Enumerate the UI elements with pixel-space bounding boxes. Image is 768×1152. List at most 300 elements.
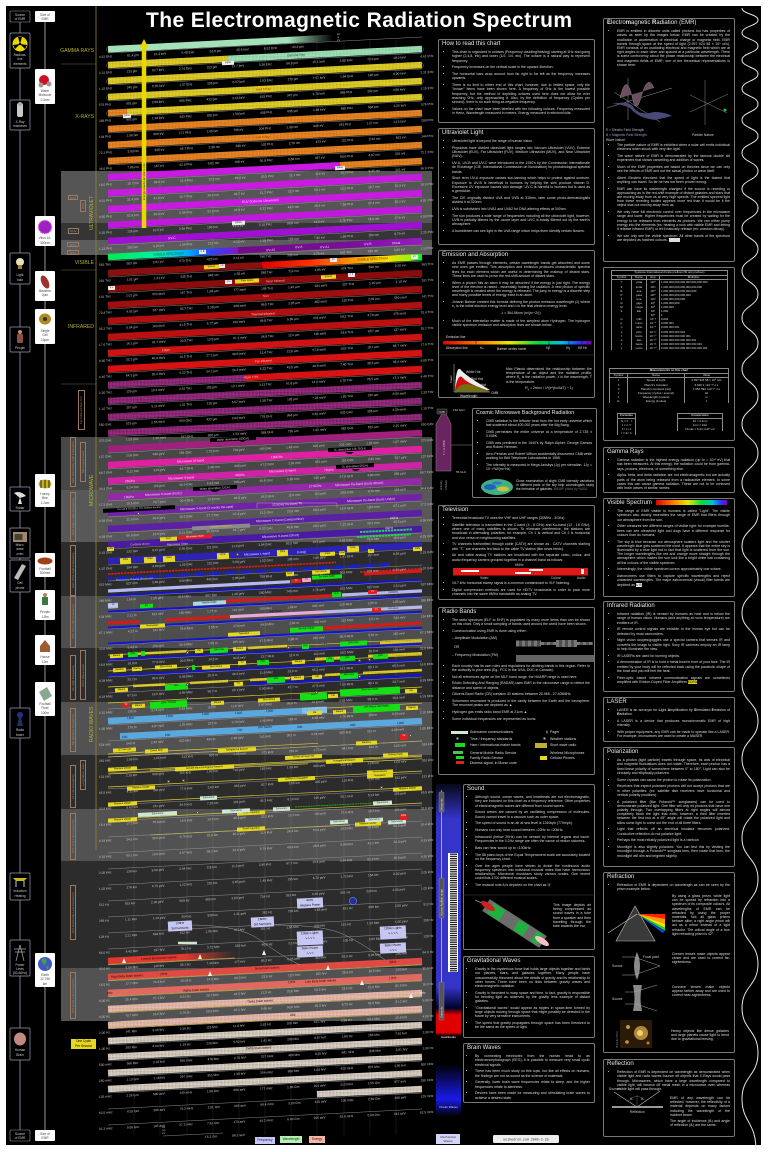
table: SI unit prefixes: 0.001 [661, 317, 668, 321]
axis labels: frequency, wavelength and energy for every octave row: 1.48 MHz [259, 718, 273, 723]
table: measurements on this chart: J [706, 399, 707, 403]
axis labels: frequency, wavelength and energy for every octave row: 20.1 m [368, 665, 378, 669]
axis labels: frequency, wavelength and energy for every octave row: 1.59 PHz [260, 238, 273, 243]
axis labels: frequency, wavelength and energy for every octave row: 370 neV [233, 624, 245, 628]
axis labels: frequency, wavelength and energy for every octave row: 2.63 Mm [369, 937, 381, 941]
source: power lines [10, 940, 30, 976]
panel: laser: LASER [607, 699, 627, 705]
panel: electromagnetic radiation: The particle nature of EMR is exhibited when a solar cell emits individual electrons when struck with very dim light. [617, 143, 730, 151]
axis labels: frequency, wavelength and energy for every octave row: 206 pm [207, 81, 218, 85]
axis labels: frequency, wavelength and energy for every octave row: 1.10 THz [420, 406, 434, 411]
axis labels: frequency, wavelength and energy for every octave row: 123 pm [127, 69, 137, 74]
icon: cmb sky map [481, 479, 513, 495]
axis labels: frequency, wavelength and energy for every octave row: 8.39 MHz [99, 678, 113, 683]
axis labels: frequency, wavelength and energy for every octave row: 138 km [126, 869, 137, 874]
axis labels: frequency, wavelength and energy for every octave row: 778 GHz [260, 414, 272, 419]
axis labels: frequency, wavelength and energy for every octave row: 8.19 kHz [421, 838, 434, 843]
axis labels: frequency, wavelength and energy for every octave row: 695 pm [287, 109, 298, 113]
chart: prism [608, 906, 665, 941]
axis labels: frequency, wavelength and energy for every octave row: 64.0 peV [393, 823, 406, 828]
axis labels: frequency, wavelength and energy for every octave row: 210 mHz [340, 1082, 353, 1087]
axis labels: frequency, wavelength and energy for every octave row: 8.59 GHz [420, 518, 434, 523]
table: SI unit prefixes: peta [636, 293, 642, 297]
axis labels: frequency, wavelength and energy for every octave row: 4.22 m [128, 629, 138, 634]
table: SI unit prefixes: E [621, 289, 622, 293]
axis labels: frequency, wavelength and energy for every octave row: 2.43 neV [151, 740, 164, 744]
chips and labels placed on the spectrum bars: 13Hz [288, 980, 296, 984]
axis labels: frequency, wavelength and energy for every octave row: 3.72 Mm [207, 945, 219, 949]
chart: hydrogen spectrum lines [438, 335, 595, 355]
axis labels: frequency, wavelength and energy for every octave row: 1.68 peV [314, 907, 327, 912]
axis labels: frequency, wavelength and energy for every octave row: 465 km [205, 897, 216, 902]
panel: infrared radiation: IR LASERs are used for burning objects. [617, 654, 680, 658]
chips and labels placed on the spectrum bars: Marine [135, 704, 142, 707]
axis labels: frequency, wavelength and energy for every octave row: 83.6 eV [154, 180, 165, 184]
axis labels: frequency, wavelength and energy for every octave row: 19.5 kHz [180, 818, 193, 823]
axis labels: frequency, wavelength and energy for every octave row: 9.98 MHz [179, 674, 193, 679]
axis labels: frequency, wavelength and energy for every octave row: 1.00 peV [395, 919, 408, 924]
chips and labels placed on the spectrum bars: Energy Levels Harmful to Life [142, 163, 146, 200]
axis labels: frequency, wavelength and energy for every octave row: 3.44 neV [311, 732, 324, 736]
axis labels: frequency, wavelength and energy for every octave row: 67.1 MHz [99, 630, 113, 635]
text: prism caption: By using a glass prism, white light can be spread by refraction into a spectrum of its composite colours. All wavelengths of EMR can be refracted by using the proper materials. Not all glass prisms behave alike; a right angle prism will act as a mirror instead of a light refractor. The critical angle of a true light refracting prism is 42°. [672, 894, 730, 936]
band name labels and frequency range tags: Long Wave radio [81, 764, 85, 786]
axis labels: frequency, wavelength and energy for every octave row: 47.7 m [288, 685, 298, 689]
axis labels: frequency, wavelength and energy for every octave row: 3.88 EHz [339, 58, 353, 63]
axis labels: frequency, wavelength and energy for every octave row: 128 peV [394, 807, 406, 812]
axis labels: frequency, wavelength and energy for every octave row: 18.7 nm [368, 185, 380, 189]
panel: ultraviolet light: Ultraviolet light is beyond the range of human vision. [452, 139, 533, 143]
axis labels: frequency, wavelength and energy for every octave row: 9.57 µm [368, 329, 379, 333]
axis labels: frequency, wavelength and energy for every octave row: 4.53 Gm [127, 1109, 139, 1114]
chart: reflection angle: Source [609, 1087, 620, 1091]
chips and labels placed on the spectrum bars: TV [240, 661, 244, 664]
source: human brain [10, 1028, 30, 1060]
axis labels: frequency, wavelength and energy for every octave row: 81.7 meV [152, 340, 166, 344]
axis labels: frequency, wavelength and energy for every octave row: 1.45 kHz [260, 878, 273, 883]
axis labels: frequency, wavelength and energy for every octave row: 1.63 EHz [260, 78, 273, 83]
chips and labels placed on the spectrum bars: Time/Frequency [242, 811, 260, 814]
axis labels: frequency, wavelength and energy for every octave row: 149 feV [153, 964, 164, 968]
size: earth: Earth [41, 973, 49, 977]
axis labels: frequency, wavelength and energy for every octave row: 5.69 µm [287, 317, 299, 321]
table: SI unit prefixes: z [621, 342, 622, 346]
axis labels: frequency, wavelength and energy for every octave row: 195 km [287, 877, 298, 881]
chips and labels placed on the spectrum bars: 40m Ham [344, 673, 354, 676]
axis labels: frequency, wavelength and energy for every octave row: 7.81 feV [395, 1031, 407, 1036]
axis labels: frequency, wavelength and energy for every octave row: 2.90 kHz [259, 862, 272, 867]
panel: television: Terrestrial broadcast TV uses the VHF and UHF ranges (30MHz - 3GHz) . [452, 516, 566, 520]
axis labels: frequency, wavelength and energy for every octave row: 215 peV [314, 795, 326, 800]
axis labels: frequency, wavelength and energy for every octave row: 343 PHz [179, 114, 192, 119]
chips and labels placed on the spectrum bars: Navigation [374, 773, 386, 777]
table: SI unit prefixes: 10⁻¹⁵ [650, 334, 656, 338]
axis labels: frequency, wavelength and energy for every octave row: 658 km [368, 905, 379, 909]
chips and labels placed on the spectrum bars: 30m Ham Radio [361, 688, 379, 691]
axis labels: frequency, wavelength and energy for every octave row: 2.25 PHz [99, 230, 112, 235]
chips and labels placed on the spectrum bars: UV-A2 [266, 248, 275, 252]
axis labels: frequency, wavelength and energy for every octave row: 2.68 keV [152, 100, 164, 104]
axis labels: frequency, wavelength and energy for every octave row: 327 GHz [181, 434, 193, 439]
size: single cell: 10µm [41, 338, 49, 342]
axis labels: frequency, wavelength and energy for every octave row: 45.5 µm [287, 365, 298, 369]
axis labels: frequency, wavelength and energy for every octave row: 19.6 mm [367, 505, 380, 509]
source: light bulb: bulb [17, 278, 23, 282]
source: microwave oven [10, 528, 30, 558]
panel: sound: Infrasound (below 20Hz) can be sensed by internal organs and touch. Frequencies in the 0.2Hz range are often the cause of motion sickness. [475, 835, 590, 843]
table: SI unit prefixes: 1,000,000,000 [661, 301, 680, 305]
legend: radio band icons: Family Radio Service [470, 756, 503, 760]
axis labels: frequency, wavelength and energy for every octave row: 5.26 Mm [368, 953, 381, 957]
axis labels: frequency, wavelength and energy for every octave row: 14.8 THz [340, 346, 353, 351]
chart: EM wave model: Wave Nature [606, 138, 625, 142]
axis labels: frequency, wavelength and energy for every octave row: 1.16 feV [153, 1076, 165, 1080]
axis labels: frequency, wavelength and energy for every octave row: 18.6 feV [153, 1012, 165, 1016]
band name labels and frequency range tags: VHF Very High Frequency [71, 605, 75, 639]
axis labels: frequency, wavelength and energy for every octave row: 256 Hz [99, 918, 109, 923]
panel: radio bands: Radio Bands [442, 609, 476, 615]
chips and labels placed on the spectrum bars: 1300 [235, 711, 242, 715]
axis labels: frequency, wavelength and energy for every octave row: 17.2 GHz [420, 502, 434, 507]
chips and labels placed on the spectrum bars: Soft X-Ray [256, 135, 270, 139]
axis labels: frequency, wavelength and energy for every octave row: 28.2 MHz [340, 650, 354, 655]
chips and labels placed on the spectrum bars: GSM [339, 551, 345, 554]
table: formulas: f = c / λ [622, 427, 631, 431]
axis labels: frequency, wavelength and energy for every octave row: 12.5 Mm [288, 973, 300, 977]
axis labels: frequency, wavelength and energy for every octave row: 1.38 feV [234, 1072, 246, 1076]
chips and labels placed on the spectrum bars: Beta brain waves [255, 965, 280, 971]
chips and labels placed on the spectrum bars: Frequency [257, 1138, 273, 1142]
axis labels: frequency, wavelength and energy for every octave row: 86.3 aeV [232, 1133, 245, 1138]
text: planck blackbody note: Max Planck determined the relationship between the temperature of an object and the radiation profile, where R λ is the radiation power, λ is the wavelength, T is the temperature. [506, 367, 592, 384]
axis labels: frequency, wavelength and energy for every octave row: 669 eV [153, 132, 164, 136]
axis labels: frequency, wavelength and energy for every octave row: 23.7 µeV [233, 528, 246, 532]
axis labels: frequency, wavelength and energy for every octave row: 50.0 Mm [287, 1005, 299, 1009]
axis labels: frequency, wavelength and energy for every octave row: 25.0 Mm [287, 989, 299, 993]
axis labels: frequency, wavelength and energy for every octave row: 52.6 mHz [340, 1114, 353, 1119]
axis labels: frequency, wavelength and energy for every octave row: 41.9 THz [179, 322, 192, 327]
axis labels: frequency, wavelength and energy for every octave row: 281 THz [99, 278, 111, 283]
axis labels: frequency, wavelength and energy for every octave row: 38.3 µm [367, 361, 379, 365]
axis labels: frequency, wavelength and energy for every octave row: 42.0 Mm [368, 1001, 380, 1005]
panel: infrared radiation: Infrared radiation (IR) is sensed by humans as heat and is below the range of human vision. Humans (and anything at room temperature) are emitters of IR. [617, 612, 730, 625]
axis labels: frequency, wavelength and energy for every octave row: 7.57 keV [313, 75, 326, 80]
panel: laser: LASER is an acronym for Light Amplification by Stimulated Emission of Radiation. [617, 708, 730, 716]
source: human brain: Human [15, 1048, 25, 1052]
axis labels: frequency, wavelength and energy for every octave row: 9.74 neV [151, 708, 164, 712]
axis labels: frequency, wavelength and energy for every octave row: 250 mHz [421, 1078, 434, 1083]
axis labels: frequency, wavelength and energy for every octave row: 24.9 THz [261, 334, 274, 339]
source footer [10, 1130, 30, 1141]
axis labels: frequency, wavelength and energy for every octave row: 2.00 peV [395, 903, 408, 908]
panel: laser: A LASER is a device that produces monochromatic EMR of high intensity. [617, 719, 730, 727]
axis labels: frequency, wavelength and energy for every octave row: 11.3 peV [231, 864, 244, 868]
axis labels: frequency, wavelength and energy for every octave row: 1.15 EHz [99, 86, 112, 91]
table: SI unit prefixes: 10⁻³ [650, 317, 656, 321]
chart: reflection angle [609, 1087, 663, 1114]
chart: EM wave model: B = Magnetic Field Strength [606, 133, 647, 137]
chart: hydrogen spectrum lines: Hδ Hε [578, 346, 588, 350]
axis labels: frequency, wavelength and energy for every octave row: 61.4 pm [127, 53, 139, 58]
axis labels: frequency, wavelength and energy for every octave row: 566 Mm [127, 1061, 138, 1066]
table: SI unit prefixes: tera [636, 297, 641, 301]
axis labels: frequency, wavelength and energy for every octave row: 39.9 µeV [152, 516, 165, 520]
axis labels: frequency, wavelength and energy for every octave row: 500 feV [397, 935, 408, 940]
chips and labels placed on the spectrum bars: 26GHz [125, 479, 135, 483]
axis labels: frequency, wavelength and energy for every octave row: 354 mHz [260, 1070, 273, 1075]
table: SI unit prefixes [611, 270, 728, 350]
chips and labels placed on the spectrum bars: Shear [392, 241, 401, 245]
axis labels: frequency, wavelength and energy for every octave row: 524 neV [394, 615, 406, 620]
image: gravitational lens galaxy field [616, 1020, 652, 1048]
chart: hydrogen spectrum lines: Absorption line [446, 346, 468, 350]
size footer: EMR [41, 1136, 49, 1140]
axis labels: frequency, wavelength and energy for every octave row: 15.6 feV [395, 1015, 407, 1020]
panel: ultraviolet light: Short term UV-A exposure causes sun-tanning which helps to protect against sunburn. Exposure to UV-B is beneficial to humans by helping the skin produce vitamin D. Excessive UV exposure causes skin damage. UV-C is harmful to humans but is used as a germicide. [452, 176, 590, 193]
axis labels: frequency, wavelength and energy for every octave row: 3.04 GHz [258, 542, 272, 547]
axis labels: frequency, wavelength and energy for every octave row: 40.9 GHz [179, 482, 193, 487]
axis labels: frequency, wavelength and energy for every octave row: 7.40 eV [314, 235, 325, 240]
axis labels: frequency, wavelength and energy for every octave row: 1.13 PHz [420, 246, 434, 251]
table: SI unit prefixes: zetta [636, 284, 642, 288]
band name labels and frequency range tags: ULTRAVIOLET [89, 196, 95, 230]
chart: TV channel band: 6MHz [515, 563, 524, 567]
table: conversions: 1Å = 0.1nm [693, 419, 707, 423]
legend: radio band icons [451, 730, 584, 765]
axis labels: frequency, wavelength and energy for every octave row: 1.25 m [367, 601, 377, 605]
axis labels: frequency, wavelength and energy for every octave row: 2.51 m [369, 617, 379, 621]
axis labels: frequency, wavelength and energy for every octave row: 178 nm [288, 237, 299, 241]
axis labels: frequency, wavelength and energy for every octave row: 777 meV [233, 287, 246, 292]
source: people [10, 327, 30, 352]
axis labels: frequency, wavelength and energy for every octave row: 152 Hz [180, 930, 190, 935]
chips and labels placed on the spectrum bars: Theta brain waves [247, 998, 273, 1004]
chart: mechanical wave scale: Heartbeats [441, 1035, 456, 1039]
axis labels: frequency, wavelength and energy for every octave row: 8.43 m [128, 645, 137, 650]
axis labels: frequency, wavelength and energy for every octave row: 16.8 MHz [420, 662, 434, 667]
chips and labels placed on the spectrum bars: 9GHz [390, 516, 398, 520]
axis labels: frequency, wavelength and energy for every octave row: 70.3 eV [394, 183, 406, 188]
icon: ionizing energy arrow [140, 39, 148, 228]
axis labels: frequency, wavelength and energy for every octave row: 4.40 eV [394, 247, 405, 252]
chart: reflection angle: Reflection [630, 1110, 645, 1114]
table: SI unit prefixes: 1,000,000,000,000,000 [661, 293, 691, 297]
chips and labels placed on the spectrum bars: Marine [113, 654, 120, 657]
axis labels: frequency, wavelength and energy for every octave row: 1.13 Gm [126, 1077, 139, 1082]
axis labels: frequency, wavelength and energy for every octave row: 15.7 nm [127, 181, 139, 186]
table: conversions: 1Joule = 6.24 ×10¹⁸ eV [685, 427, 715, 431]
legend: radio band icons: ▮ [546, 730, 548, 734]
axis labels: frequency, wavelength and energy for every octave row: 268 MHz [99, 598, 112, 603]
chips and labels placed on the spectrum bars: 13Hz [389, 976, 397, 980]
axis labels: frequency, wavelength and energy for every octave row: 52.5 feV [314, 987, 326, 992]
axis labels: frequency, wavelength and energy for every octave row: 2.11 m [127, 613, 137, 618]
table: measurements on this chart: Energy (Joules) [646, 399, 666, 403]
axis labels: frequency, wavelength and energy for every octave row: 454 m [206, 737, 215, 742]
chart: convex lens: Focal point [643, 955, 659, 959]
axis labels: frequency, wavelength and energy for every octave row: 8.24 mm [127, 485, 139, 490]
axis labels: frequency, wavelength and energy for every octave row: 391 km [286, 893, 296, 897]
chips and labels placed on the spectrum bars: TV [402, 734, 406, 737]
text: planck blackbody note [506, 367, 592, 392]
axis labels: frequency, wavelength and energy for every octave row: 524 kHz [422, 742, 434, 747]
table: SI unit prefixes: y [621, 346, 622, 350]
axis labels: frequency, wavelength and energy for every octave row: 85.7 PHz [180, 146, 193, 151]
axis labels: frequency, wavelength and energy for every octave row: 3.44 kHz [340, 858, 353, 863]
axis labels: frequency, wavelength and energy for every octave row: 32.2 µm [126, 357, 138, 362]
axis labels: frequency, wavelength and energy for every octave row: 84.1 Mm [367, 1017, 380, 1021]
axis labels: frequency, wavelength and energy for every octave row: 28.2 µeV [313, 523, 326, 528]
axis labels: frequency, wavelength and energy for every octave row: 9.28 feV [152, 1028, 164, 1032]
axis labels: frequency, wavelength and energy for every octave row: 186 mm [287, 557, 299, 561]
axis labels: frequency, wavelength and energy for every octave row: 485 PHz [341, 106, 353, 111]
text: planck blackbody note: R λ = 2πhc² / λ⁵(e^(hc/λkT) − 1) [525, 386, 573, 392]
axis labels: frequency, wavelength and energy for every octave row: 65.5 kHz [421, 790, 434, 795]
axis labels: frequency, wavelength and energy for every octave row: 242 PHz [339, 122, 351, 127]
axis labels: frequency, wavelength and energy for every octave row: 113 µeV [314, 491, 326, 496]
band name labels and frequency range tags [60, 48, 95, 1019]
axis labels: frequency, wavelength and energy for every octave row: 10.5 eV [153, 228, 164, 232]
table: SI unit prefixes: 10⁻⁶ [650, 321, 656, 325]
source: microwave oven: Micro- [16, 543, 24, 547]
axis labels: frequency, wavelength and energy for every octave row: 741 kHz [259, 734, 271, 739]
axis labels: frequency, wavelength and energy for every octave row: 10.5 THz [179, 354, 192, 359]
panel: television: Digital compression methods are used for HDTV broadcasts in order to pack more channels into the same 6MHz bandwidth as analog TV. [452, 588, 590, 596]
axis labels: frequency, wavelength and energy for every octave row: 5.23 eV [153, 244, 164, 248]
chips and labels placed on the spectrum bars: Marine [295, 660, 302, 663]
panel: visible spectrum: Astronomers use filters to capture specific wavelengths and reject unwanted wavelengths. The major astronomical (visual) filter bands are depicted as U B [617, 574, 730, 587]
source: induction heating: Heating [14, 894, 26, 898]
axis labels: frequency, wavelength and energy for every octave row: 1.52 meV [233, 431, 247, 436]
axis labels: frequency, wavelength and energy for every octave row: 116 GHz [341, 458, 354, 463]
legend: radio band icons: Time / frequency standards [470, 737, 512, 741]
axis labels: frequency, wavelength and energy for every octave row: 3.70 eV [313, 252, 324, 256]
chips and labels placed on the spectrum bars: EUV (Extreme Ultraviolet) [242, 198, 279, 204]
chips and labels placed on the spectrum bars: 3rd harmonic [171, 926, 189, 930]
chips and labels placed on the spectrum bars: Newspaper [146, 624, 159, 627]
chips and labels placed on the spectrum bars: Microwave Q-band [269, 468, 296, 474]
axis labels: frequency, wavelength and energy for every octave row: 34.4 GHz [420, 486, 434, 491]
chips and labels placed on the spectrum bars: Cruise Ship [150, 749, 163, 752]
axis labels: frequency, wavelength and energy for every octave row: 231 meV [313, 315, 326, 320]
axis labels: frequency, wavelength and energy for every octave row: 70.4 THz [99, 310, 112, 315]
axis labels: frequency, wavelength and energy for every octave row: 9.01 PHz [420, 198, 434, 203]
axis labels: frequency, wavelength and energy for every octave row: 3.11 eV [233, 256, 244, 260]
axis labels: frequency, wavelength and energy for every octave row: 10.0 m [368, 649, 378, 653]
chips and labels placed on the spectrum bars: Microwave L-band [244, 551, 270, 557]
axis labels: frequency, wavelength and energy for every octave row: 443 mm [206, 577, 218, 582]
table: SI unit prefixes: 0.000 000 000 000 000 000 001 [661, 342, 702, 346]
chips and labels placed on the spectrum bars: Near Infrared [266, 279, 285, 283]
table: SI unit prefixes: 1,000,000,000,000,000,000,000,000 [661, 280, 708, 284]
axis labels: frequency, wavelength and energy for every octave row: 22.1 feV [234, 1008, 246, 1012]
axis labels: frequency, wavelength and energy for every octave row: 5.79 kHz [260, 846, 273, 851]
chips and labels placed on the spectrum bars: Short Wave [263, 698, 275, 701]
axis labels: frequency, wavelength and energy for every octave row: 319 MHz [178, 594, 191, 599]
axis labels: frequency, wavelength and energy for every octave row: 1.28 meV [153, 436, 166, 440]
axis labels: frequency, wavelength and energy for every octave row: 21.4 keV [154, 52, 166, 56]
chart: convex lens: Source [612, 964, 623, 968]
axis labels: frequency, wavelength and energy for every octave row: 22.8 µm [287, 349, 298, 353]
chips and labels placed on the spectrum bars: Microwave W-band [177, 458, 204, 464]
axis labels: frequency, wavelength and energy for every octave row: 11.1 nm [289, 173, 300, 177]
size: water molecule: 0.3nm [41, 98, 50, 102]
axis labels: frequency, wavelength and energy for every octave row: 2.31 EHz [420, 70, 434, 75]
panel: laser [603, 697, 735, 742]
chips and labels placed on the spectrum bars: GPS [350, 546, 356, 549]
chart: reflection angle: θᵣ [641, 1097, 644, 1101]
axis labels: frequency, wavelength and energy for every octave row: 1.37 EHz [179, 82, 193, 87]
axis labels: frequency, wavelength and energy for every octave row: 2.97 MHz [258, 702, 272, 707]
axis labels: frequency, wavelength and energy for every octave row: 2.25 PHz [420, 230, 434, 235]
axis labels: frequency, wavelength and energy for every octave row: 4.50 PHz [99, 214, 112, 219]
axis labels: frequency, wavelength and energy for every octave row: 116 km [206, 865, 217, 870]
text: convex lens caption: Convex lenses make objects appear closer and are used to correct far-sightedness. [672, 952, 730, 964]
axis labels: frequency, wavelength and energy for every octave row: 48.9 km [287, 845, 299, 849]
axis labels: frequency, wavelength and energy for every octave row: 1.15 EHz [420, 86, 434, 91]
chips and labels placed on the spectrum bars: 8Hz [107, 991, 113, 995]
chips and labels placed on the spectrum bars: High Beta brain waves [111, 973, 143, 979]
icon: FM waveform [516, 655, 594, 662]
axis labels: frequency, wavelength and energy for every octave row: 121 PHz [341, 138, 353, 143]
axis labels: frequency, wavelength and energy for every octave row: 23.7 MHz [260, 654, 274, 659]
axis labels: frequency, wavelength and energy for every octave row: 380 MHz [259, 590, 272, 595]
size: football: 300mm [40, 571, 51, 575]
axis labels: frequency, wavelength and energy for every octave row: 1.07 GHz [420, 566, 434, 571]
axis labels: frequency, wavelength and energy for every octave row: 5.93 MHz [259, 686, 273, 691]
axis labels: frequency, wavelength and energy for every octave row: 11.6 mm [288, 493, 300, 497]
axis labels: frequency, wavelength and energy for every octave row: 39.0 kHz [179, 802, 192, 807]
chart: mechanical wave scale: Waves [443, 1139, 453, 1143]
axis labels: frequency, wavelength and energy for every octave row: 20.5 km [367, 825, 379, 829]
axis labels: frequency, wavelength and energy for every octave row: 353 feV [235, 944, 246, 948]
panel: ultraviolet light: The sun produces a wide range of frequencies including all the ultraviolet light, however, UVB is partially filtered by the ozone layer and UVC is totally filtered out by the earth's atmosphere. [452, 214, 590, 226]
axis labels: frequency, wavelength and energy for every octave row: 2.83 peV [231, 896, 244, 900]
axis labels: frequency, wavelength and energy for every octave row: 128 Hz [423, 934, 434, 938]
axis labels: frequency, wavelength and energy for every octave row: 204 PHz [259, 126, 271, 131]
table: SI unit prefixes: 10¹⁸ [650, 289, 656, 293]
size: house [35, 635, 55, 665]
size: bacteria [35, 271, 55, 301]
axis labels: frequency, wavelength and energy for every octave row: 34.5 km [126, 837, 138, 842]
axis labels: frequency, wavelength and energy for every octave row: 5.66 Hz [261, 1006, 272, 1011]
axis labels: frequency, wavelength and energy for every octave row: 26.4 nm [207, 193, 219, 197]
axis labels: frequency, wavelength and energy for every octave row: 16.4 kHz [421, 822, 434, 827]
axis labels: frequency, wavelength and energy for every octave row: 1.02 kHz [99, 886, 112, 891]
axis labels: frequency, wavelength and energy for every octave row: 110 kHz [342, 778, 353, 783]
axis labels: frequency, wavelength and energy for every octave row: 3.55 m [208, 625, 218, 629]
axis labels: frequency, wavelength and energy for every octave row: 7.61 Gm [207, 1121, 219, 1125]
panel: emission and absorption: When a photon hits an atom it may be absorbed if the energy is just right. The energy level of the electron is raised - essentially holding the radiation. A new photon of specific wavelength is created when the energy is released. The jump in energy is a discrete step and many possible levels of energy exist in an atom. [452, 281, 590, 297]
table: measurements on this chart: 1.054 592 ×10⁻³⁴ J·s [693, 387, 720, 391]
panel: refraction: Refraction of EMR is dependent on wavelength as can be seen by the prism example below. [617, 883, 730, 891]
panel: electromagnetic radiation [603, 18, 735, 262]
table: SI unit prefixes: yocto [636, 346, 642, 350]
panel: gamma rays: Gamma radiation is the highest energy radiation (up to ≈ 10²⁰ eV) that has been measured. At this energy, the radiation could be from gamma-rays, protons, electrons, or something else. [617, 458, 730, 471]
axis labels: frequency, wavelength and energy for every octave row: 321 m [367, 729, 376, 733]
axis labels: frequency, wavelength and energy for every octave row: 796 eV [233, 128, 244, 132]
panel: emission and absorption: λ = 364.56nm (n²/(n²−2²)) [501, 311, 541, 315]
axis labels: frequency, wavelength and energy for every octave row: 257 µm [126, 405, 137, 410]
axis labels: frequency, wavelength and energy for every octave row: 11.9 MHz [259, 670, 273, 675]
size: earth: 12,756 [40, 977, 50, 981]
axis labels: frequency, wavelength and energy for every octave row: 16.4 neV [392, 695, 405, 700]
axis labels: frequency, wavelength and energy for every octave row: 30.3 PHz [340, 170, 354, 175]
axis labels: frequency, wavelength and energy for every octave row: 288 PHz [421, 118, 434, 123]
size header: EMR [41, 17, 49, 21]
panel: ultraviolet light [438, 128, 595, 245]
chips and labels placed on the spectrum bars: 4GHz [385, 526, 393, 530]
